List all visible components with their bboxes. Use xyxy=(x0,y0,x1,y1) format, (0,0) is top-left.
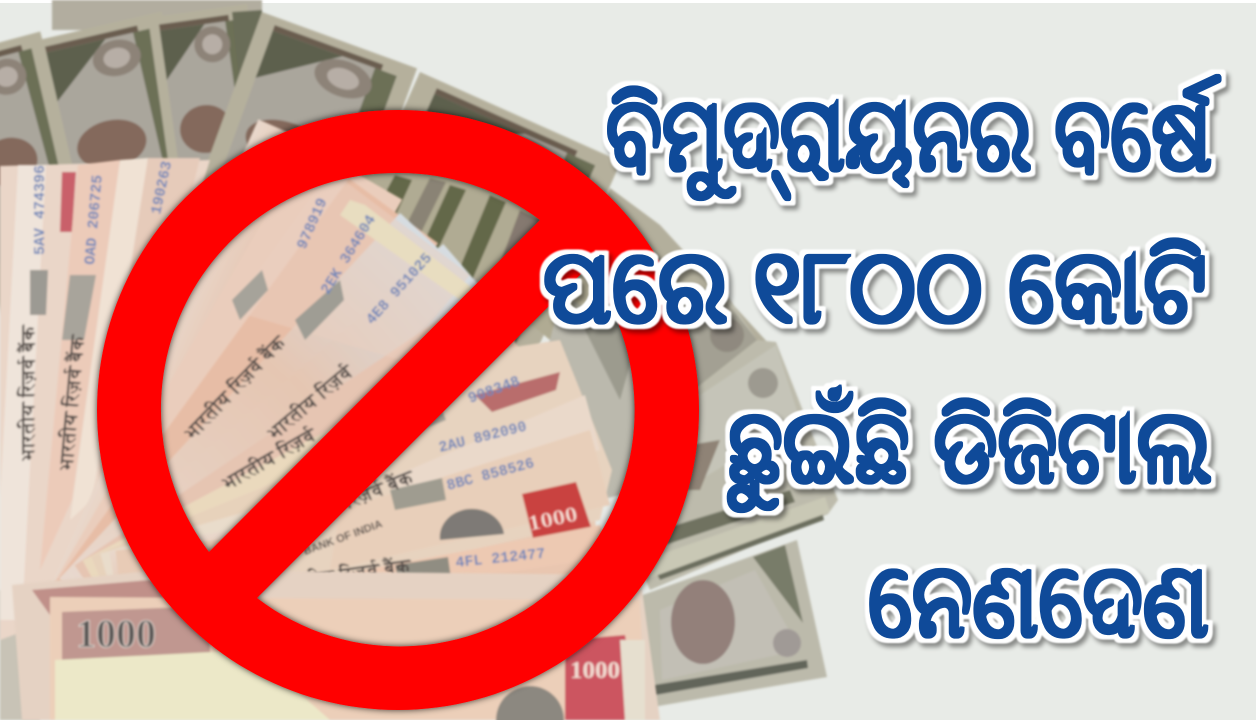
pink banknotes fan inside the ring: 8BC 858526 xyxy=(445,455,536,495)
banknote fan illustration xyxy=(0,0,838,720)
upper band behind the ring xyxy=(340,170,640,340)
pink banknotes fan inside the ring: भारतीय रिज़र्व बैंक xyxy=(179,329,292,445)
gray notes inside the ring on the right xyxy=(540,320,640,500)
pink banknotes fan inside the ring: BANK OF INDIA xyxy=(302,518,384,558)
pink banknotes fan inside the ring: भारतीय रिज़र्व xyxy=(262,359,358,445)
dark old banknotes fan xyxy=(0,0,838,708)
pink banknotes at left: OAD 206725 xyxy=(82,174,107,265)
front 1000 rupee banknotes xyxy=(12,501,660,720)
pink banknotes fan inside the ring: भारतीय रिज़र्व बैंक xyxy=(281,464,419,537)
pink banknotes fan inside the ring: 2AU 892090 xyxy=(437,419,529,457)
right side notes xyxy=(620,280,838,590)
headline xyxy=(543,74,1221,659)
pink banknotes fan inside the ring: भारतीय रिज़र्व xyxy=(217,422,321,495)
pink banknotes fan inside the ring: 978919 xyxy=(294,196,332,252)
pink banknotes fan inside the ring: 4E8 951025 xyxy=(363,250,436,328)
pink banknotes fan inside the ring: भारतीय रिज़र्व बैंक xyxy=(274,553,414,595)
pink banknotes at left: 190263 xyxy=(148,160,176,216)
pink banknotes fan inside the ring: भारतीय रिज़र्व बैंक xyxy=(279,610,419,640)
pink banknotes at left: 5AV 474396 xyxy=(32,165,49,255)
pink banknotes at left: भारतीय रिज़र्व बैंक xyxy=(16,323,39,462)
pink banknotes at left: भारतीय रिज़र्व बैंक xyxy=(54,332,89,472)
front 1000 rupee banknotes: 1000 xyxy=(570,658,620,684)
pink banknotes at left xyxy=(0,158,210,640)
pink banknotes fan inside the ring xyxy=(43,119,620,658)
prohibition sign xyxy=(97,110,699,710)
lower right notes in ring xyxy=(260,340,612,590)
pink banknotes fan inside the ring: BANK OF INDIA xyxy=(309,588,393,609)
front 1000 rupee banknotes: 1000 xyxy=(76,611,156,656)
pink banknotes fan inside the ring: 2EK 364604 xyxy=(318,212,380,298)
pink banknotes fan inside the ring: 4FL 212477 xyxy=(455,546,546,572)
right front note with portrait xyxy=(637,540,827,708)
front 1000 rupee banknotes: 1000 xyxy=(526,501,580,536)
bottom-left edge xyxy=(0,590,40,720)
pink banknotes fan inside the ring: 908348 xyxy=(466,373,522,408)
